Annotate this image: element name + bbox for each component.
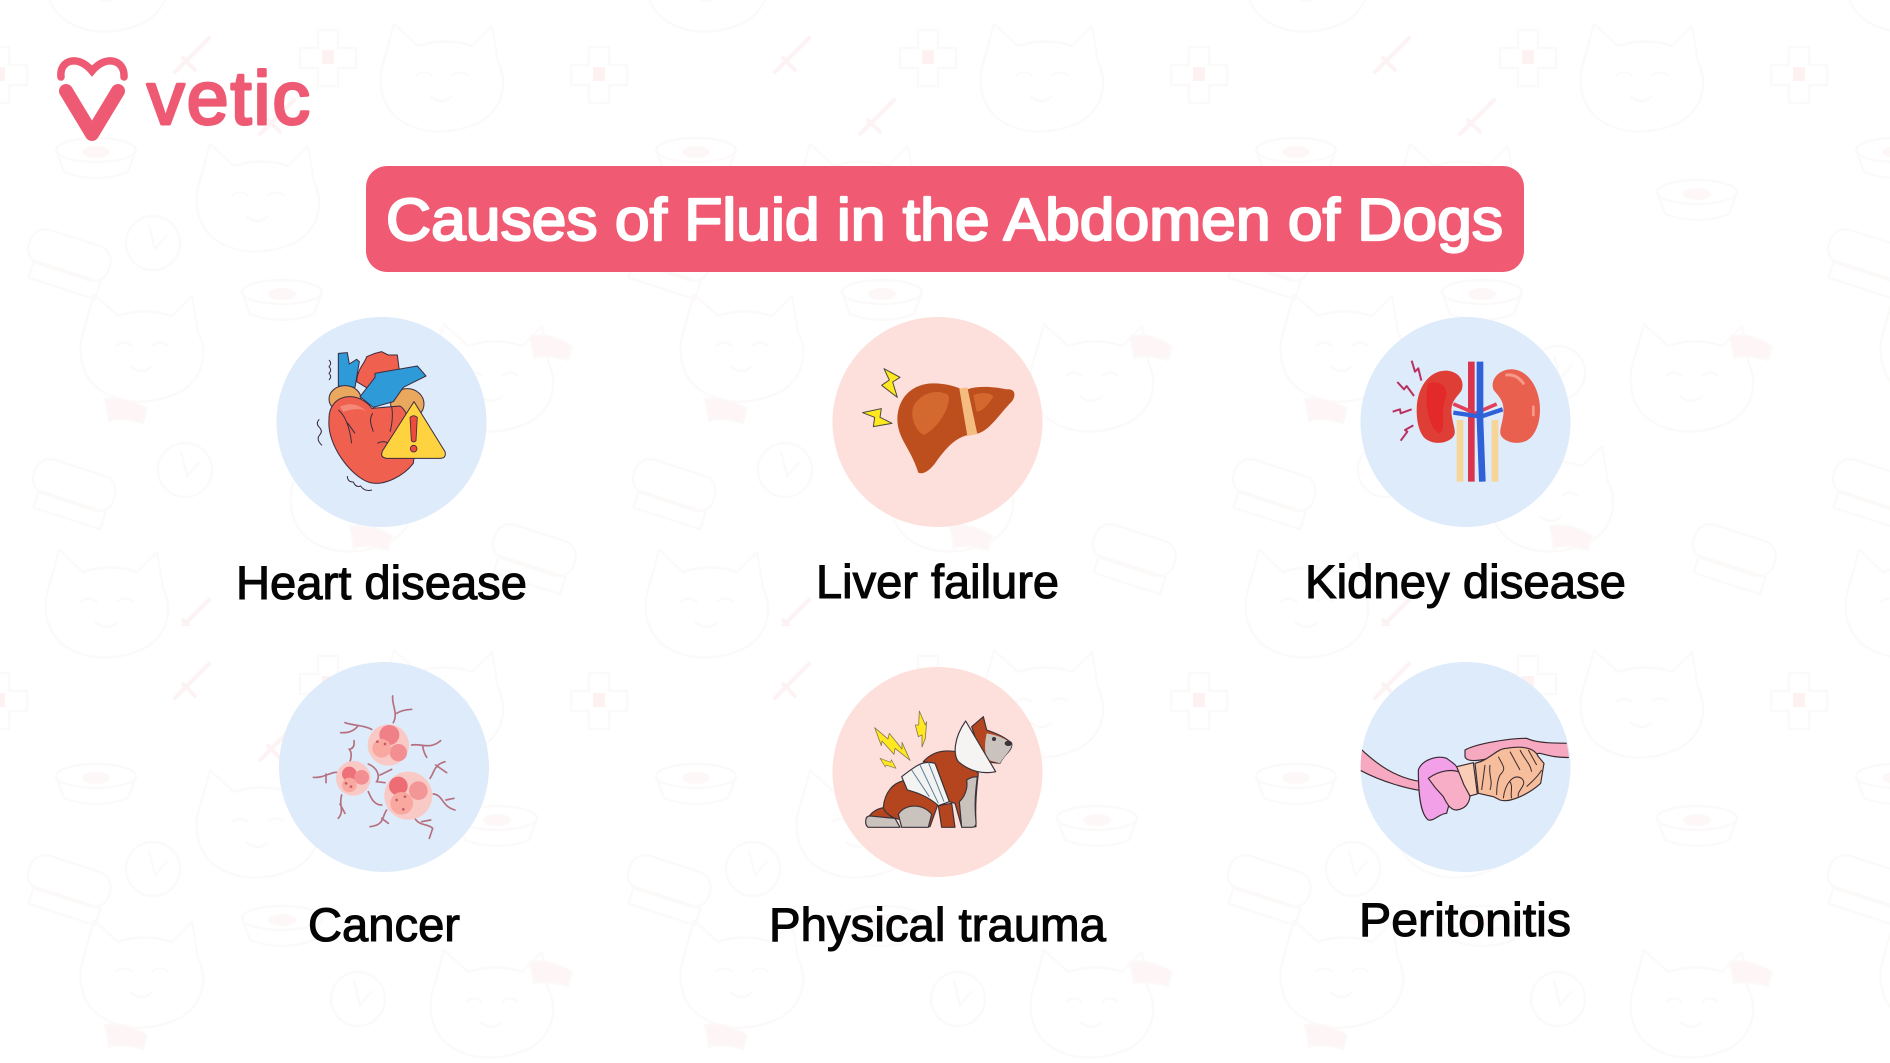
- label: Physical trauma: [769, 898, 1107, 951]
- icon: heart V mark: [61, 61, 124, 134]
- icon: liver: [863, 369, 1014, 473]
- label: Kidney disease: [1305, 555, 1626, 608]
- icon: injured dog: [866, 711, 1012, 827]
- icon: digestive tract: [1357, 738, 1573, 820]
- label: Heart disease: [236, 556, 527, 609]
- label: Liver failure: [816, 555, 1059, 608]
- panel: liver failure: [816, 317, 1059, 608]
- panel: heart disease: [236, 317, 527, 609]
- icon: heart with warning: [317, 352, 445, 490]
- title banner: [366, 166, 1524, 272]
- logo wordmark: vetic: [147, 56, 310, 140]
- label: Cancer: [308, 898, 460, 951]
- title banner: Causes of Fluid in the Abdomen of Dogs: [386, 187, 1503, 253]
- logo: vetic: [61, 56, 310, 140]
- panel: kidney disease: [1305, 317, 1626, 608]
- panel: physical trauma: [769, 667, 1107, 951]
- panel: cancer: [279, 662, 489, 951]
- label: Peritonitis: [1359, 893, 1571, 946]
- icon: cancer cells: [313, 696, 455, 838]
- panel: peritonitis: [1357, 662, 1573, 946]
- icon: kidneys: [1393, 361, 1540, 482]
